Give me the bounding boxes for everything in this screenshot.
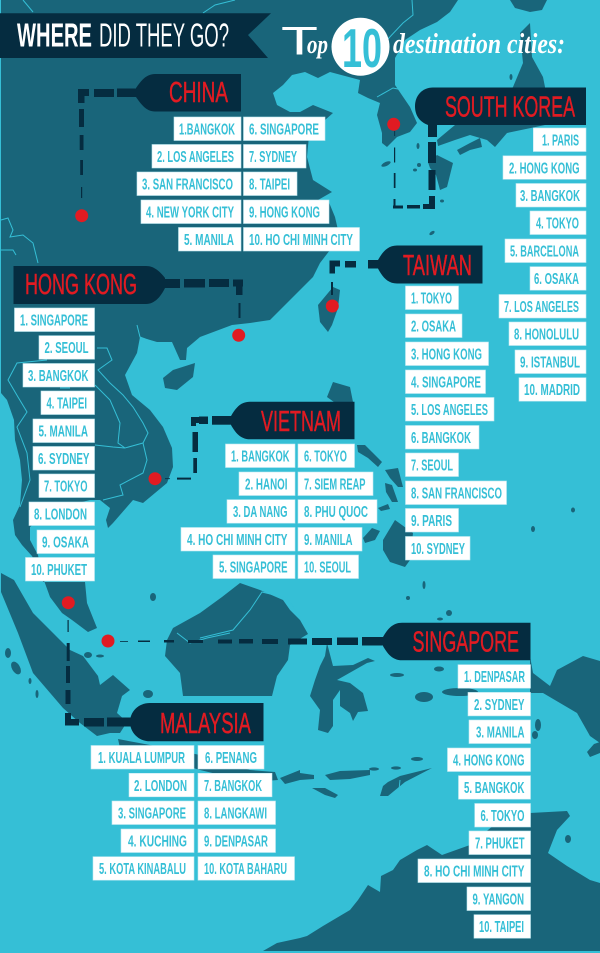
tile: Singapore 2 [468, 692, 530, 716]
tile: Singapore 4: 4. HONG KONG [453, 752, 524, 770]
tile: Vietnam 9 [298, 528, 362, 551]
tile: Hong Kong 4: 4. TAIPEI [46, 396, 87, 412]
tile: Malaysia 7 [198, 773, 272, 797]
tile: Taiwan 1 [406, 286, 458, 310]
tile: Taiwan 8: 8. SAN FRANCISCO [411, 486, 502, 502]
tile: Taiwan 6: 6. BANGKOK [411, 430, 471, 447]
heading: top 10 destination cities: destination cities: [393, 29, 565, 60]
tile: Taiwan 4 [406, 370, 486, 394]
tile: South Korea 1 [533, 128, 586, 152]
tile: Hong Kong 1 [14, 308, 94, 332]
tile: Singapore 9: 9. YANGON [472, 892, 524, 908]
tile: Taiwan 2 [406, 314, 462, 338]
tile: Vietnam 8 [298, 500, 377, 523]
tile: China 6: 6. SINGAPORE [249, 121, 319, 138]
tile: Malaysia 9: 9. DENPASAR [204, 834, 268, 850]
tile: Vietnam 6 [298, 444, 354, 468]
tile: Singapore 9 [467, 887, 530, 910]
tile: Taiwan 7: 7. SEOUL [411, 458, 453, 474]
tile: Singapore 3: 3. MANILA [476, 724, 525, 742]
tile: Malaysia 7: 7. BANGKOK [204, 778, 262, 795]
tile: Taiwan 1: 1. TOKYO [411, 290, 452, 308]
list: Taiwan [406, 286, 506, 560]
tile: Singapore 7 [469, 831, 530, 854]
tile: China 10 [244, 228, 360, 251]
tile: Malaysia 10: 10. KOTA BAHARU [204, 861, 287, 878]
tile: China 1: 1.BANGKOK [179, 121, 235, 138]
tile: Vietnam 4: 4. HO CHI MINH CITY [187, 532, 288, 549]
tile: Vietnam 3 [227, 500, 295, 523]
route line: South Korea [393, 120, 437, 209]
tile: Singapore 2: 2. SYDNEY [474, 697, 525, 714]
tile: Malaysia 6: 6. PENANG [205, 750, 257, 767]
tile: Taiwan 9: 9. PARIS [411, 513, 452, 530]
tile: Vietnam 10: 10. SEOUL [304, 560, 351, 576]
tile: Hong Kong 7: 7. TOKYO [44, 478, 88, 496]
list: Malaysia [91, 746, 294, 880]
tile: Singapore 10 [474, 915, 530, 938]
label: China [136, 74, 241, 112]
tile: China 6 [244, 117, 325, 140]
tile: South Korea 10 [519, 378, 586, 401]
title banner: DID THEY GO? [99, 16, 229, 54]
tile: Taiwan 5 [406, 398, 494, 421]
marker: Hong Kong [232, 329, 245, 342]
route line: Singapore [120, 637, 386, 646]
tile: Taiwan 9 [406, 508, 458, 532]
tile: Taiwan 2: 2. OSAKA [411, 318, 456, 336]
tile: South Korea 5 [505, 239, 586, 262]
tile: Hong Kong 10: 10. PHUKET [31, 562, 87, 579]
tile: South Korea 6 [530, 267, 586, 290]
Kyushu [428, 155, 453, 190]
tile: South Korea 8 [509, 322, 586, 346]
label: Singapore [383, 623, 530, 660]
tile: Hong Kong 4 [41, 391, 94, 414]
title banner [0, 13, 271, 58]
marker: Singapore [102, 634, 114, 648]
title banner: WHERE [17, 16, 92, 54]
tile: Vietnam 7: 7. SIEM REAP [304, 476, 366, 494]
tile: Hong Kong 6: 6. SYDNEY [38, 451, 90, 468]
tile: South Korea 9 [515, 350, 586, 374]
tile: Singapore 8: 8. HO CHI MINH CITY [424, 864, 525, 880]
tile: China 10: 10. HO CHI MINH CITY [249, 232, 353, 249]
tile: Vietnam 2: 2. HANOI [245, 476, 288, 494]
tile: South Korea 4 [530, 211, 586, 234]
heading: top 10 destination cities: T [281, 20, 318, 64]
tile: Vietnam 8: 8. PHU QUOC [304, 504, 368, 521]
label: Singapore: SINGAPORE [412, 626, 519, 658]
marker: South Korea [387, 118, 400, 131]
label: Vietnam [231, 402, 354, 439]
list: South Korea [499, 128, 586, 401]
tile: Hong Kong 2 [39, 336, 94, 359]
tile: Malaysia 1: 1. KUALA LUMPUR [98, 750, 185, 767]
tile: China 8 [244, 172, 297, 196]
tile: Singapore 5: 5. BANGKOK [464, 780, 525, 797]
tile: Malaysia 4: 4. KUCHING [128, 834, 187, 850]
tile: Vietnam 10 [298, 555, 358, 578]
tile: Taiwan 5: 5. LOS ANGELES [411, 402, 488, 419]
tile: Hong Kong 2: 2. SEOUL [44, 340, 89, 357]
route line: Vietnam [165, 416, 232, 480]
tile: China 3 [137, 172, 241, 196]
tile: Malaysia 2 [129, 773, 194, 797]
tile: Singapore 1: 1. DENPASAR [464, 669, 525, 686]
tile: South Korea 2 [503, 156, 586, 179]
marker: China [75, 209, 88, 222]
tile: Hong Kong 10 [26, 558, 94, 581]
tile: China 3: 3. SAN FRANCISCO [142, 176, 233, 194]
tile: Vietnam 9: 9. MANILA [304, 532, 353, 549]
tile: China 8: 8. TAIPEI [249, 176, 290, 194]
tile: Malaysia 9 [198, 829, 276, 852]
tile: Hong Kong 3 [23, 364, 94, 387]
marker: Taiwan [326, 300, 339, 312]
tile: Vietnam 1: 1. BANGKOK [231, 448, 290, 466]
tile: Taiwan 3 [406, 342, 488, 366]
label: Hong Kong: HONG KONG [25, 269, 137, 301]
tile: Malaysia 10 [198, 857, 294, 880]
tile: South Korea 3 [516, 184, 586, 207]
tile: Hong Kong 1: 1. SINGAPORE [20, 312, 88, 330]
tile: China 2 [152, 144, 241, 168]
tile: China 2: 2. LOS ANGELES [157, 149, 234, 166]
tile: Malaysia 6 [198, 746, 264, 769]
tile: China 7 [244, 144, 306, 168]
route line: China [78, 88, 137, 198]
tile: China 5: 5. MANILA [184, 232, 234, 249]
label: Vietnam: VIETNAM [261, 406, 341, 438]
tile: Taiwan 8 [406, 481, 506, 504]
tile: Taiwan 7 [406, 453, 458, 476]
tile: Vietnam 1 [226, 444, 295, 468]
tile: China 7: 7. SYDNEY [249, 149, 297, 166]
label: South Korea [415, 88, 586, 125]
tile: Vietnam 3: 3. DA NANG [233, 504, 288, 521]
tile: Vietnam 7 [298, 472, 373, 496]
tile: China 9 [244, 200, 329, 224]
tile: Vietnam 5 [213, 555, 295, 578]
tile: Singapore 10: 10. TAIPEI [479, 919, 524, 936]
Shikoku [457, 138, 482, 155]
tile: Malaysia 3: 3. SINGAPORE [118, 806, 186, 822]
heading: top 10 destination cities: op [307, 30, 328, 59]
list: Vietnam [181, 444, 377, 578]
tile: Vietnam 5: 5. SINGAPORE [219, 560, 288, 576]
tile: Vietnam 6: 6. TOKYO [304, 448, 347, 466]
label: Taiwan: TAIWAN [403, 250, 472, 282]
tile: China 1 [174, 117, 241, 140]
route line: Malaysia [65, 620, 133, 726]
list: China [137, 117, 360, 251]
tile: Malaysia 8: 8. LANGKAWI [204, 806, 267, 822]
tile: Singapore 6: 6. TOKYO [480, 808, 524, 825]
tile: Hong Kong 8 [29, 502, 94, 526]
tile: Taiwan 10: 10. SYDNEY [411, 541, 465, 558]
tile: Hong Kong 5 [33, 419, 94, 442]
map: country borders [1, 0, 413, 790]
route line: Taiwan [330, 260, 380, 295]
tile: Hong Kong 8: 8. LONDON [34, 506, 87, 524]
tile: Hong Kong 3: 3. BANGKOK [28, 368, 89, 385]
tile: Taiwan 4: 4. SINGAPORE [411, 374, 481, 392]
tile: Hong Kong 5: 5. MANILA [38, 424, 88, 440]
tile: Hong Kong 9: 9. OSAKA [42, 534, 89, 552]
tile: Vietnam 4 [181, 528, 295, 551]
tile: Hong Kong 9 [37, 530, 94, 554]
marker: Vietnam [148, 472, 162, 485]
tile: Malaysia 5: 5. KOTA KINABALU [99, 861, 186, 878]
tile: China 5 [178, 228, 241, 251]
tile: Malaysia 5 [93, 857, 194, 880]
label: Malaysia: MALAYSIA [160, 708, 251, 740]
list: Hong Kong [14, 308, 94, 581]
tile: Singapore 3 [469, 720, 530, 744]
label: Taiwan [378, 246, 482, 284]
tile: Hong Kong 7 [39, 474, 94, 498]
heading: top 10 destination cities [281, 17, 565, 79]
tile: Singapore 4 [448, 748, 530, 772]
tile: Malaysia 8 [198, 801, 276, 824]
tile: Taiwan 10 [406, 536, 470, 560]
route line: Hong Kong [160, 279, 243, 318]
tile: Malaysia 1 [91, 746, 194, 769]
tile: Hong Kong 6 [33, 446, 94, 470]
tile: Malaysia 3 [112, 801, 194, 824]
tile: Taiwan 6 [406, 426, 479, 449]
list: Singapore [418, 665, 530, 938]
tile: Malaysia 2: 2. LONDON [134, 778, 187, 795]
heading: top 10 destination cities: 10 [342, 17, 382, 79]
tile: Singapore 6 [475, 804, 530, 827]
tile: Singapore 8 [418, 859, 530, 882]
tile: China 4 [141, 200, 241, 224]
marker: Malaysia [62, 596, 75, 609]
tile: Singapore 1 [458, 665, 530, 688]
label: China: CHINA [169, 77, 228, 109]
tile: Malaysia 4 [121, 829, 194, 852]
tile: South Korea 7 [499, 294, 586, 318]
tile: China 4: 4. NEW YORK CITY [146, 204, 234, 222]
label: Hong Kong [14, 266, 165, 304]
tile: China 9: 9. HONG KONG [249, 204, 320, 222]
tile: Singapore 5 [458, 776, 530, 799]
label: Malaysia [130, 703, 264, 741]
tile: Vietnam 2 [239, 472, 295, 496]
tile: Singapore 7: 7. PHUKET [475, 836, 525, 852]
tile: Taiwan 3: 3. HONG KONG [411, 346, 482, 364]
